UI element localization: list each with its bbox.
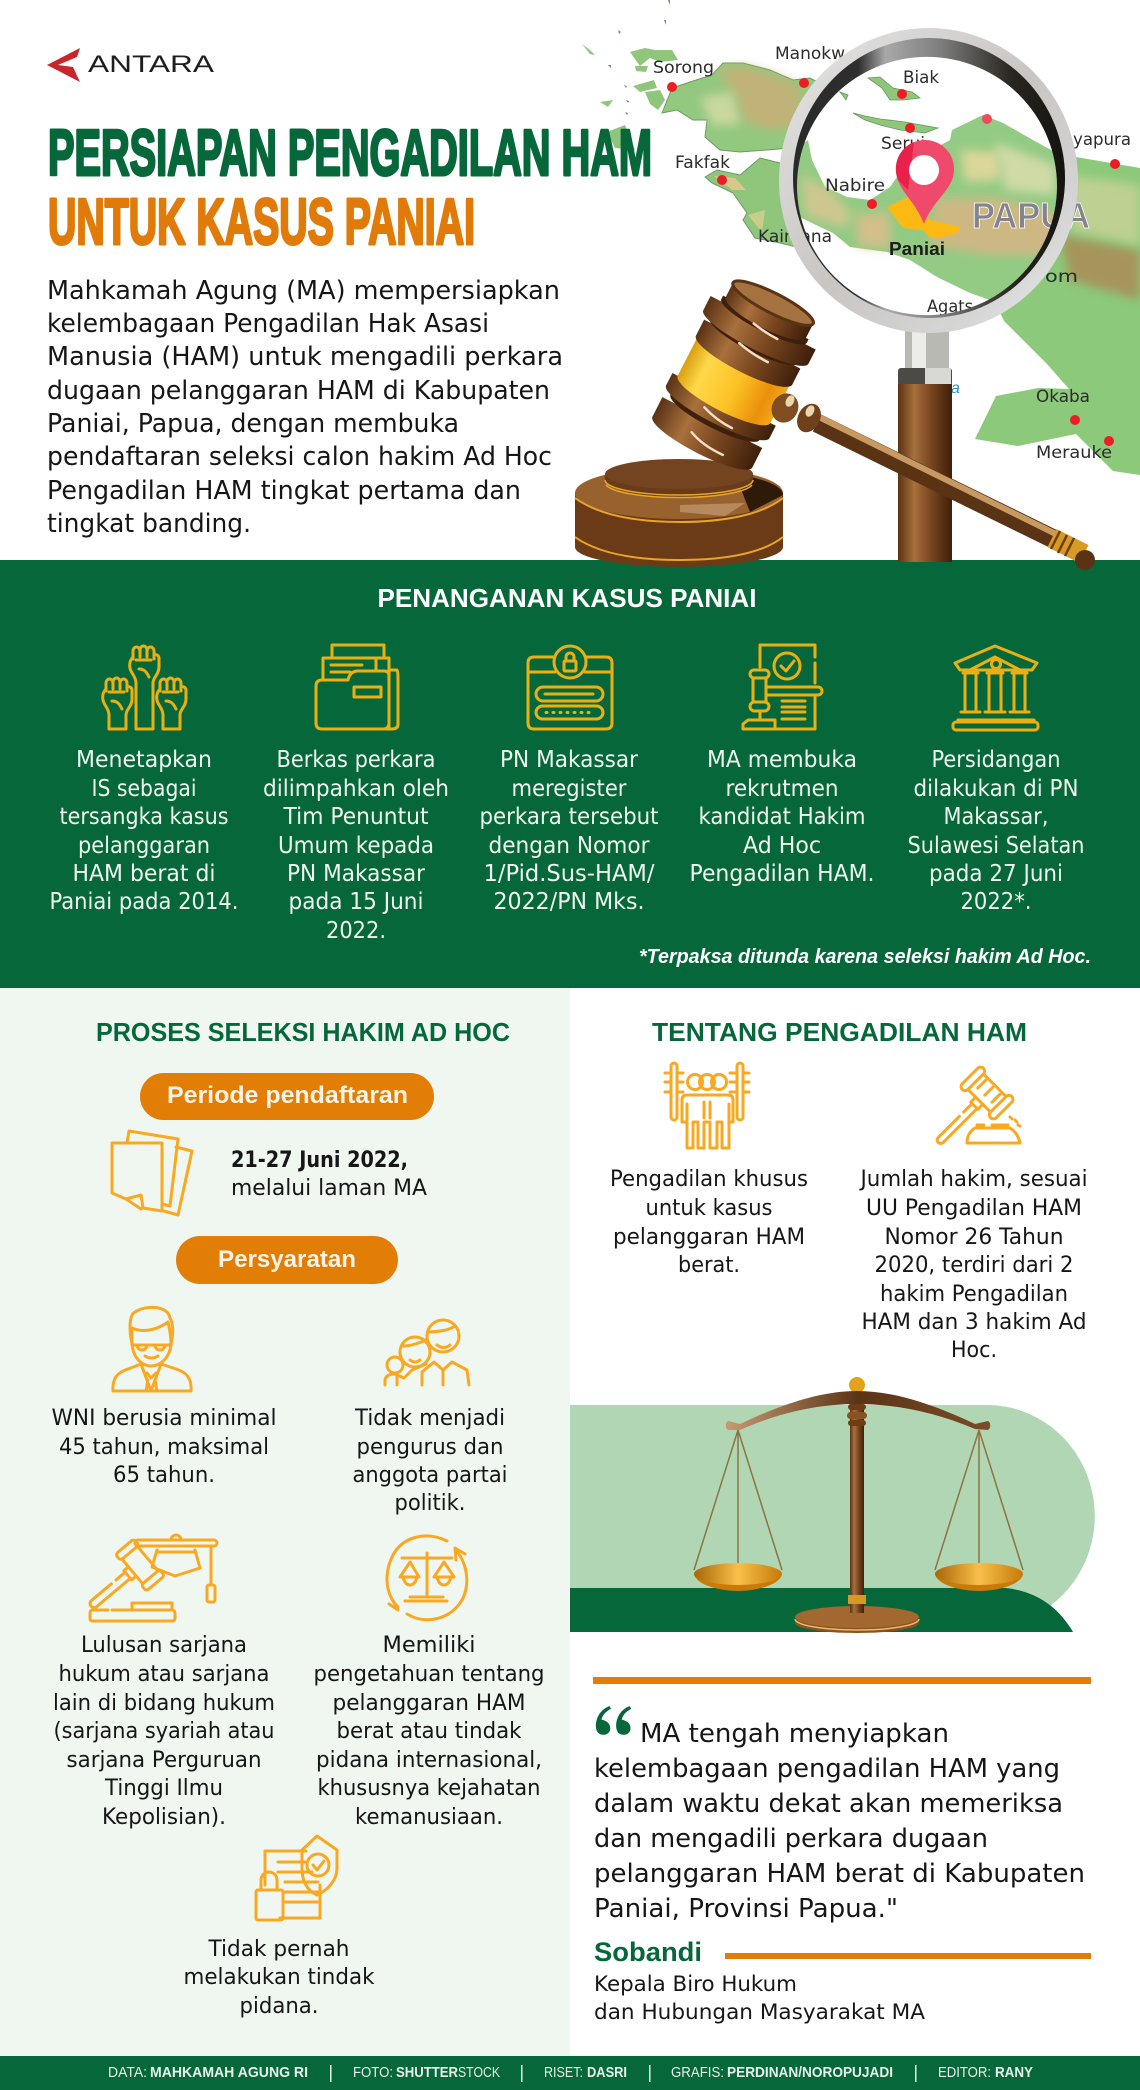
- quote: speaker name: Sobandi: [594, 1937, 702, 1967]
- text: WNI age: 65 tahun.: [113, 1462, 215, 1488]
- lens view: Nabire: [825, 176, 885, 196]
- text: step 1: tersangka kasus: [60, 804, 228, 830]
- text: step 4: [690, 747, 874, 887]
- text: knowledge of human rights: pengetahuan tentang: [314, 1661, 544, 1687]
- text: knowledge of human rights: pelanggaran HAM: [332, 1690, 526, 1716]
- title: [48, 116, 652, 258]
- map: Bird's Head land: [662, 63, 860, 165]
- text: special court: pelanggaran HAM: [613, 1224, 805, 1250]
- quote: text: Paniai, Provinsi Papua.": [594, 1894, 898, 1924]
- text: number of judges: Hoc.: [951, 1337, 997, 1363]
- map: city markers outside lens: [667, 78, 1120, 446]
- lens view: Agats: [927, 297, 973, 317]
- text: not party member: pengurus dan: [356, 1434, 504, 1460]
- pill: Periode pendaftaran: Periode pendaftaran: [167, 1082, 408, 1109]
- text: knowledge of human rights: kemanusiaan.: [355, 1804, 503, 1830]
- map: Fakfak peninsula: [705, 158, 850, 260]
- text: knowledge of human rights: pidana internasional,: [316, 1747, 542, 1773]
- text: step 2: pada 15 Juni: [288, 889, 424, 915]
- sound block: [575, 459, 783, 567]
- text: law graduate: (sarjana syariah atau: [54, 1718, 274, 1744]
- text: step 5: [908, 747, 1084, 915]
- quote: text: dalam waktu dekat akan memeriksa: [594, 1789, 1063, 1819]
- quote: text: kelembagaan pengadilan HAM yang: [594, 1754, 1060, 1784]
- gavel handle knobs: [767, 389, 826, 436]
- text: step 5: pada 27 Juni: [929, 861, 1063, 887]
- map label: Kaimana: Kaimana: [758, 227, 832, 247]
- text: step 5: Makassar,: [944, 804, 1048, 830]
- text: step 4: Ad Hoc: [743, 833, 821, 859]
- text: step 5: 2022*.: [960, 889, 1032, 915]
- footer: credits: DASRI: [587, 2064, 627, 2081]
- icon: document, shield and padlock: [256, 1836, 337, 1920]
- text: number of judges: 2020, terdiri dari 2: [874, 1252, 1074, 1278]
- text: step 2: [263, 747, 449, 944]
- quote: speaker title: Kepala Biro Hukum: [594, 1972, 797, 1997]
- logo: ANTARA: ANTARA: [88, 51, 214, 78]
- footnote: *Terpaksa ditunda karena seleksi hakim Ad Hoc.: [639, 946, 1091, 968]
- footer: credits: SHUTTER: [396, 2064, 458, 2081]
- intro text block: Manusia (HAM) untuk mengadili perkara: [47, 342, 563, 372]
- gavel handle: [817, 417, 1095, 570]
- backdrop: scale background shapes: [570, 1405, 1095, 1632]
- map label: Sorong: Sorong: [653, 58, 714, 78]
- label: Paniai: Paniai: [889, 239, 945, 259]
- text: step 5: dilakukan di PN: [914, 776, 1078, 802]
- text: registration period: 21-27 Juni 2022,: [231, 1147, 408, 1173]
- quote: speaker title: dan Hubungan Masyarakat MA: [594, 2000, 925, 2025]
- icon: documents: [112, 1131, 192, 1215]
- lens view: [797, 70, 1057, 314]
- text: no criminal record: [184, 1936, 374, 2019]
- text: not party member: anggota partai: [352, 1462, 508, 1488]
- quote: speaker title: [594, 1972, 925, 2025]
- text: step 2: 2022.: [326, 918, 386, 944]
- text: law graduate: hukum atau sarjana: [58, 1661, 270, 1687]
- text: knowledge of human rights: berat atau tindak: [336, 1718, 522, 1744]
- title: UNTUK KASUS PANIAI: [48, 185, 475, 258]
- text: step 4: kandidat Hakim: [698, 804, 866, 830]
- pill: Persyaratan: Persyaratan: [218, 1246, 356, 1273]
- lens view: Serui: [881, 134, 925, 154]
- text: step 4: rekrutmen: [726, 776, 838, 802]
- scale left pan: [694, 1430, 782, 1591]
- lens rim: [779, 28, 1078, 333]
- text: no criminal record: pidana.: [240, 1993, 318, 2019]
- text: number of judges: [859, 1166, 1088, 1363]
- text: not party member: politik.: [394, 1490, 466, 1516]
- text: law graduate: Kepolisian).: [102, 1804, 226, 1830]
- intro text block: Pengadilan HAM tingkat pertama dan: [47, 476, 521, 506]
- text: special court: untuk kasus: [646, 1195, 772, 1221]
- text: special court: [610, 1166, 808, 1278]
- text: law graduate: [53, 1632, 275, 1830]
- icon: gavel: [921, 1065, 1020, 1159]
- heading: Tentang Pengadilan HAM: TENTANG PENGADILAN HAM: [652, 1017, 1027, 1047]
- text: WNI age: WNI berusia minimal: [52, 1405, 276, 1431]
- text: knowledge of human rights: Memiliki: [382, 1632, 476, 1658]
- map: eastern mainland: [975, 150, 1140, 475]
- magnifying glass: [758, 28, 1090, 562]
- gavel illustration: [575, 267, 1095, 570]
- text: step 3: meregister: [512, 776, 627, 802]
- quote: text: pelanggaran HAM berat di Kabupaten: [594, 1859, 1085, 1889]
- icon: secure login: [528, 646, 612, 729]
- footer: credits: RANY: [995, 2064, 1033, 2081]
- footer: credits: MAHKAMAH AGUNG RI: [150, 2064, 308, 2081]
- text: step 1: Menetapkan: [76, 747, 212, 773]
- text: not party member: [352, 1405, 508, 1516]
- intro text block: Paniai, Papua, dengan membuka: [47, 409, 459, 439]
- text: registration period: melalui laman MA: [231, 1175, 428, 1201]
- heading: Penanganan Kasus Paniai: PENANGANAN KASUS PANIAI: [378, 583, 756, 613]
- text: number of judges: Jumlah hakim, sesuai: [859, 1166, 1088, 1192]
- footer: credits: GRAFIS:: [671, 2064, 724, 2081]
- text: step 5: Persidangan: [932, 747, 1060, 773]
- icon: family: [385, 1320, 469, 1385]
- footer: credits: DATA:: [108, 2064, 147, 2081]
- icon: location pin: [896, 140, 954, 224]
- icon: man with glasses: [113, 1307, 191, 1391]
- panel: header background: [0, 0, 1140, 560]
- text: step 4: Pengadilan HAM.: [690, 861, 874, 887]
- footer: credits: [0, 2056, 1140, 2090]
- icon: gavel and document: [743, 645, 822, 729]
- illustration: balance scale: [694, 1377, 1023, 1633]
- text: special court: Pengadilan khusus: [610, 1166, 808, 1192]
- intro text block: [47, 276, 563, 539]
- map label: Merauke: Merauke: [1036, 443, 1112, 463]
- quote: top rule: [593, 1677, 1091, 1684]
- icon: raised fists: [103, 646, 186, 729]
- icon: gavel with graduation cap: [76, 1535, 217, 1625]
- map of Papua: [582, 0, 1140, 475]
- text: number of judges: UU Pengadilan HAM: [866, 1195, 1082, 1221]
- text: law graduate: Lulusan sarjana: [81, 1632, 247, 1658]
- pill: Persyaratan: [176, 1236, 398, 1284]
- map label: Fakfak: Fakfak: [675, 153, 730, 173]
- icon: people behind bars: [665, 1063, 749, 1148]
- text: number of judges: Nomor 26 Tahun: [884, 1224, 1064, 1250]
- footer: credits: PERDINAN/NOROPUJADI: [727, 2064, 893, 2081]
- region label: PAPUA: PAPUA: [972, 195, 1090, 236]
- pill: Periode pendaftaran: [140, 1073, 434, 1120]
- text: step 2: dilimpahkan oleh: [263, 776, 449, 802]
- text: knowledge of human rights: [314, 1632, 544, 1830]
- intro text block: tingkat banding.: [47, 509, 251, 539]
- intro text block: pendaftaran seleksi calon hakim Ad Hoc: [47, 442, 552, 472]
- text: not party member: Tidak menjadi: [354, 1405, 505, 1431]
- text: number of judges: HAM dan 3 hakim Ad: [862, 1309, 1086, 1335]
- icon: case folder: [316, 645, 398, 729]
- text: step 1: HAM berat di: [72, 861, 216, 887]
- map label: Wanam: om: [1045, 267, 1078, 287]
- text: step 3: 2022/PN Mks.: [494, 889, 644, 915]
- text: Arafura sea fragment: a: [951, 380, 960, 397]
- scale right pan: [935, 1430, 1023, 1591]
- title: PERSIAPAN PENGADILAN HAM: [48, 116, 652, 189]
- text: step 5: Sulawesi Selatan: [908, 833, 1084, 859]
- quote: text: [594, 1719, 1085, 1924]
- text: step 2: Umum kepada: [278, 833, 434, 859]
- text: step 2: PN Makassar: [287, 861, 426, 887]
- text: step 2: Berkas perkara: [276, 747, 436, 773]
- icon: courthouse: [953, 646, 1038, 730]
- heading: Proses Seleksi Hakim Ad Hoc: PROSES SELEKSI HAKIM AD HOC: [96, 1017, 510, 1047]
- intro text block: dugaan pelanggaran HAM di Kabupaten: [47, 376, 550, 406]
- map label: Jayapura: yapura: [1073, 130, 1131, 150]
- text: law graduate: sarjana Perguruan: [66, 1747, 262, 1773]
- text: number of judges: hakim Pengadilan: [880, 1281, 1068, 1307]
- green band: Penanganan Kasus Paniai background: [0, 560, 1140, 988]
- text: law graduate: Tinggi Ilmu: [104, 1775, 223, 1801]
- footer: credits: FOTO:: [353, 2064, 393, 2081]
- quote: speaker rule: [725, 1953, 1091, 1959]
- logo: ANTARA: [47, 48, 214, 82]
- footer: credits: STOCK: [458, 2064, 500, 2081]
- map: small islands: [582, 44, 678, 150]
- scale column and base: [795, 1377, 919, 1633]
- quote: mark: “: [548, 1680, 638, 1810]
- text: knowledge of human rights: khususnya kejahatan: [318, 1775, 540, 1801]
- text: step 3: dengan Nomor: [488, 833, 650, 859]
- scale beam: [726, 1391, 990, 1430]
- text: step 3: 1/Pid.Sus-HAM/: [484, 861, 655, 887]
- intro text block: kelembagaan Pengadilan Hak Asasi: [47, 309, 489, 339]
- map label: Manokwari: Manokw: [775, 44, 845, 64]
- panel: selection process background: [0, 988, 570, 2056]
- lens view: Biak: [903, 68, 939, 88]
- text: WNI age: 45 tahun, maksimal: [59, 1434, 269, 1460]
- lens handle: [898, 326, 952, 562]
- map label: Okaba: Okaba: [1036, 387, 1090, 407]
- text: special court: berat.: [678, 1252, 740, 1278]
- text: step 1: [50, 747, 238, 915]
- icon: Paniai regency shape: [887, 197, 960, 238]
- text: no criminal record: melakukan tindak: [184, 1964, 374, 1990]
- text: law graduate: lain di bidang hukum: [53, 1690, 275, 1716]
- icon: scales in circular arrows: [387, 1536, 467, 1620]
- text: WNI age: [52, 1405, 276, 1488]
- footer: credits: EDITOR:: [938, 2064, 991, 2081]
- gavel head: [644, 267, 830, 480]
- text: no criminal record: Tidak pernah: [208, 1936, 350, 1962]
- text: step 1: pelanggaran: [78, 833, 210, 859]
- quote: text: dan mengadili perkara dugaan: [594, 1824, 988, 1854]
- text: registration period: [231, 1147, 428, 1201]
- text: step 1: Paniai pada 2014.: [50, 889, 238, 915]
- footer: credits: RISET:: [544, 2064, 583, 2081]
- text: step 3: perkara tersebut: [480, 804, 658, 830]
- text: step 4: MA membuka: [707, 747, 857, 773]
- text: step 1: IS sebagai: [92, 776, 196, 802]
- text: step 3: PN Makassar: [500, 747, 639, 773]
- text: step 3: [480, 747, 658, 915]
- quote: text: MA tengah menyiapkan: [640, 1719, 949, 1749]
- intro text block: Mahkamah Agung (MA) mempersiapkan: [47, 276, 560, 306]
- text: step 2: Tim Penuntut: [283, 804, 428, 830]
